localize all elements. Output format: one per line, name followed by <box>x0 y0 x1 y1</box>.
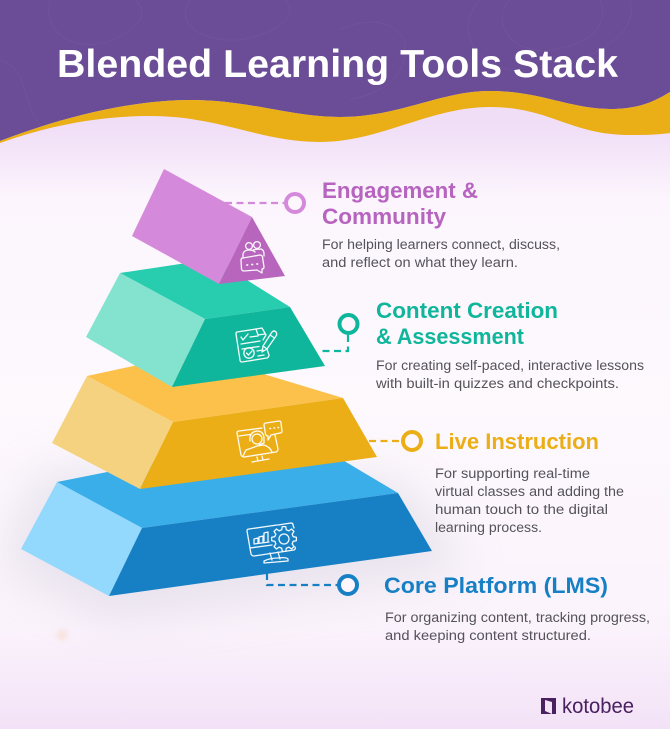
icon: monitor with gear <box>247 523 296 563</box>
text block: engagement and community: Community <box>322 204 447 229</box>
pyramid layer: live instruction <box>52 353 377 489</box>
marker: engagement <box>286 194 304 212</box>
text block: engagement and community: Engagement & <box>322 178 478 203</box>
text block: engagement and community: and reflect on what they learn. <box>322 255 518 270</box>
marker: content creation <box>340 315 358 333</box>
marker: live instruction <box>403 432 421 450</box>
icon: video call monitor <box>237 421 282 462</box>
text block: content creation and assessment: For creating self-paced, interactive lessons <box>376 358 644 373</box>
text block: live instruction <box>435 429 624 535</box>
text block: live instruction: learning process. <box>435 520 542 535</box>
text block: engagement and community: For helping learners connect, discuss, <box>322 237 560 252</box>
header band <box>0 0 670 141</box>
text block: live instruction: virtual classes and adding the <box>435 484 624 499</box>
marker: core platform <box>339 576 357 594</box>
text block: core platform: and keeping content structured. <box>385 628 591 643</box>
text block: content creation and assessment: & Assessment <box>376 324 525 349</box>
text block: live instruction: For supporting real-time <box>435 466 590 481</box>
connector: engagement <box>225 202 284 204</box>
text block: live instruction: Live Instruction <box>435 429 599 454</box>
pyramid layer: core platform <box>21 434 432 596</box>
logo: kotobee: kotobee <box>562 695 634 718</box>
title: Blended Learning Tools Stack <box>57 43 618 86</box>
text block: core platform: For organizing content, tracking progress, <box>385 610 650 625</box>
gold wave <box>0 91 670 143</box>
connector: core platform <box>267 573 337 585</box>
icon: checklist and pencil <box>236 328 277 362</box>
icon: discussion group <box>241 242 264 273</box>
text block: live instruction: human touch to the digital <box>435 502 608 517</box>
pyramid layer: content creation <box>86 259 325 387</box>
soft peach dot <box>57 630 67 640</box>
text block: core platform: Core Platform (LMS) <box>384 573 608 598</box>
text block: content creation and assessment: Content Creation <box>376 298 558 323</box>
connector: live instruction <box>369 440 401 442</box>
text block: core platform <box>384 573 650 643</box>
connector: content creation <box>319 335 348 351</box>
text block: content creation and assessment: with built-in quizzes and checkpoints. <box>375 376 619 391</box>
pyramid drop shadow <box>0 470 470 620</box>
text block: engagement and community <box>322 178 560 270</box>
pyramid layer: engagement and community <box>132 169 285 284</box>
text block: content creation and assessment <box>375 298 644 391</box>
